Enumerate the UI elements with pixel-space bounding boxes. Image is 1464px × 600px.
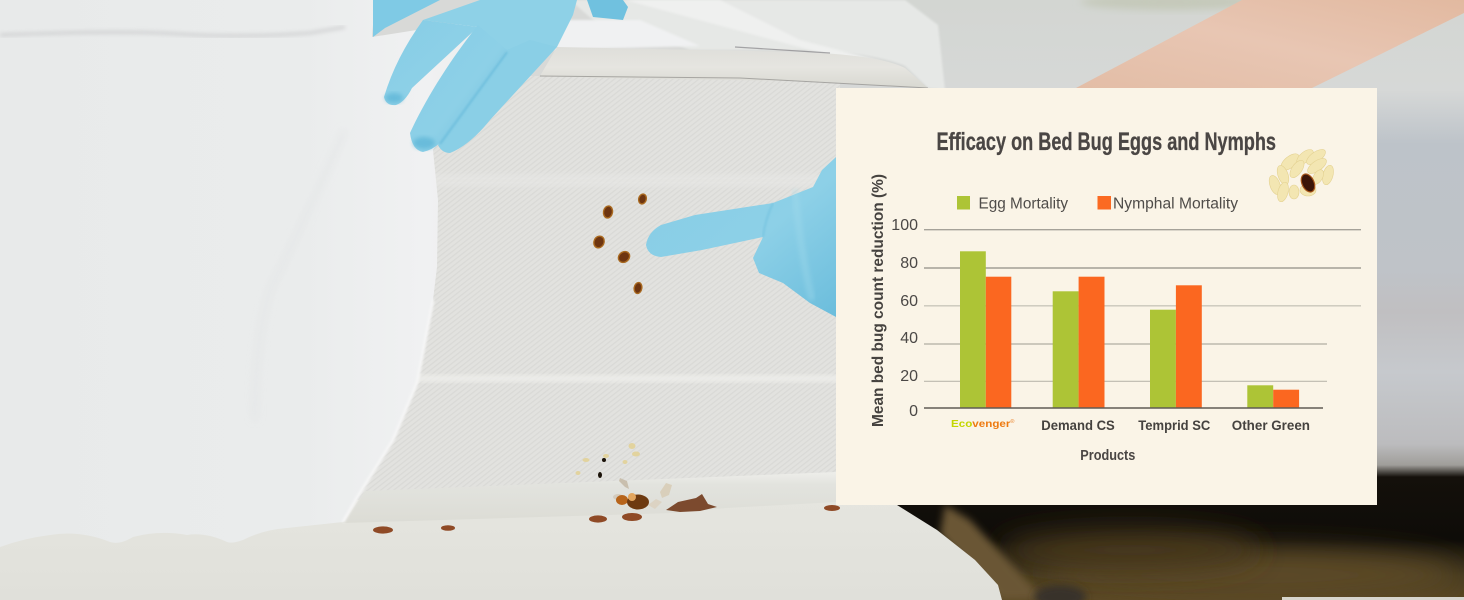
category label: Ecovenger logo: ® — [1010, 418, 1015, 425]
y-axis tick labels: 60 — [900, 293, 918, 310]
category label: Ecovenger logo: Ecovenger — [951, 418, 1007, 430]
category labels: Demand CS — [1041, 417, 1115, 433]
chart title: Efficacy on Bed Bug Eggs and Nymphs — [936, 128, 1276, 156]
bed bugs on the mattress — [592, 193, 647, 294]
category labels: Other Green — [1232, 417, 1310, 433]
mattress top piping — [540, 47, 928, 88]
lower mattress surface — [0, 500, 1002, 600]
legend — [957, 196, 1238, 212]
white sheet — [0, 0, 500, 547]
y-axis tick labels: 0 — [909, 403, 918, 420]
gloved hand on top of the mattress — [373, 0, 628, 153]
icon: bed bug with eggs — [1267, 147, 1335, 203]
category labels: Temprid SC — [1138, 417, 1210, 433]
arm in background — [1076, 0, 1464, 88]
eggs and droppings near the seam — [576, 443, 672, 509]
rust stains on the surface — [373, 505, 840, 534]
y-axis tick labels: 100 — [891, 217, 918, 234]
category labels — [1041, 417, 1310, 433]
y-axis tick labels — [891, 217, 918, 420]
bars: Temprid SC — [1150, 285, 1202, 408]
y-axis tick labels: 20 — [900, 368, 918, 385]
bar chart — [924, 230, 1361, 408]
droppings cluster on the piping — [666, 494, 717, 512]
glove palm — [423, 0, 577, 52]
gloved pointing hand — [646, 157, 836, 317]
glove finger two — [410, 25, 507, 152]
large bed bug on the piping — [616, 493, 649, 510]
bars: Ecovenger — [960, 251, 1011, 408]
bars: Other Green — [1247, 385, 1299, 408]
mattress quilted side — [345, 76, 840, 496]
legend: Nymphal Mortality — [1113, 196, 1238, 212]
upper bedding — [545, 0, 945, 90]
glove finger three — [438, 40, 557, 153]
y-axis tick labels: 40 — [900, 330, 918, 347]
glove finger one — [384, 20, 478, 105]
bars: Demand CS — [1053, 277, 1104, 408]
x-axis title: Products — [1080, 447, 1135, 464]
y-axis title: Mean bed bug count reduction (%) — [870, 174, 887, 427]
legend: Egg Mortality — [978, 196, 1068, 212]
y-axis tick labels: 80 — [900, 255, 918, 272]
blurred room background — [820, 0, 1464, 600]
chart panel — [836, 88, 1377, 505]
mattress bottom piping — [343, 472, 836, 523]
